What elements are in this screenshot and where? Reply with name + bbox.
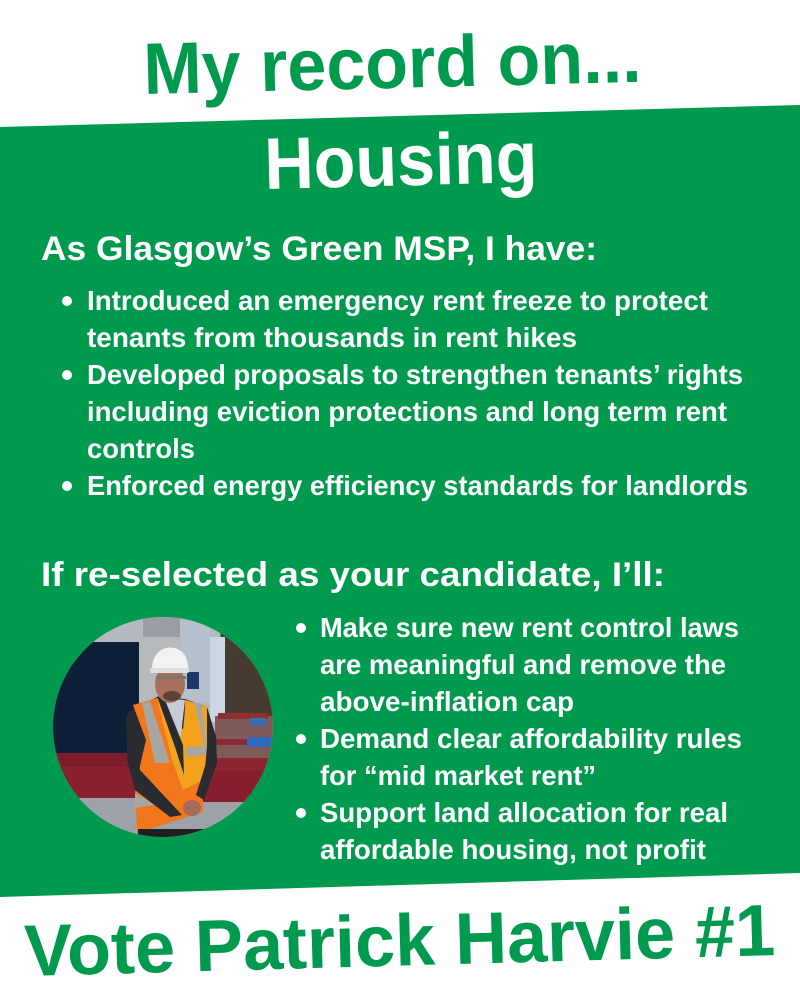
list: pledges: affordable housing, not profit xyxy=(320,834,706,865)
title: My record on...: My record on... xyxy=(142,17,642,110)
green background band xyxy=(0,105,800,897)
hard hat xyxy=(152,648,188,670)
list: pledges: Make sure new rent control laws xyxy=(320,612,739,643)
subheading: record: As Glasgow’s Green MSP, I have: xyxy=(41,230,597,268)
heading: Housing: Housing xyxy=(263,117,538,205)
shirt and tie area xyxy=(166,700,185,738)
list: record achievements xyxy=(62,285,748,501)
list: record achievements: Introduced an emergency rent freeze to protect xyxy=(87,285,708,316)
sleeves xyxy=(127,742,182,817)
list: pledges: for “mid market rent” xyxy=(320,760,596,791)
photo: Patrick Harvie in hi-vis and hard hat xyxy=(53,617,273,839)
face xyxy=(155,673,185,703)
list: record achievements: including eviction protections and long term rent xyxy=(87,396,727,427)
list: pledges: Demand clear affordability rules xyxy=(320,723,742,754)
list: record achievements: Enforced energy efficiency standards for landlords xyxy=(87,470,748,501)
footer call to action: Vote Patrick Harvie #1 xyxy=(23,890,776,992)
list: record achievements: Developed proposals to strengthen tenants’ rights xyxy=(87,359,743,390)
jacket xyxy=(126,697,217,800)
hands and trousers xyxy=(183,800,201,816)
subheading: pledges: If re-selected as your candidate, I’ll: xyxy=(41,556,665,594)
list: record achievements: controls xyxy=(87,433,195,464)
list: record achievements: tenants from thousands in rent hikes xyxy=(87,322,577,353)
list: pledges: Support land allocation for real xyxy=(320,797,728,828)
list: pledges xyxy=(296,612,742,865)
list: pledges: are meaningful and remove the xyxy=(320,649,726,680)
list: pledges: above-inflation cap xyxy=(320,686,574,717)
hi-vis vest xyxy=(133,698,207,833)
